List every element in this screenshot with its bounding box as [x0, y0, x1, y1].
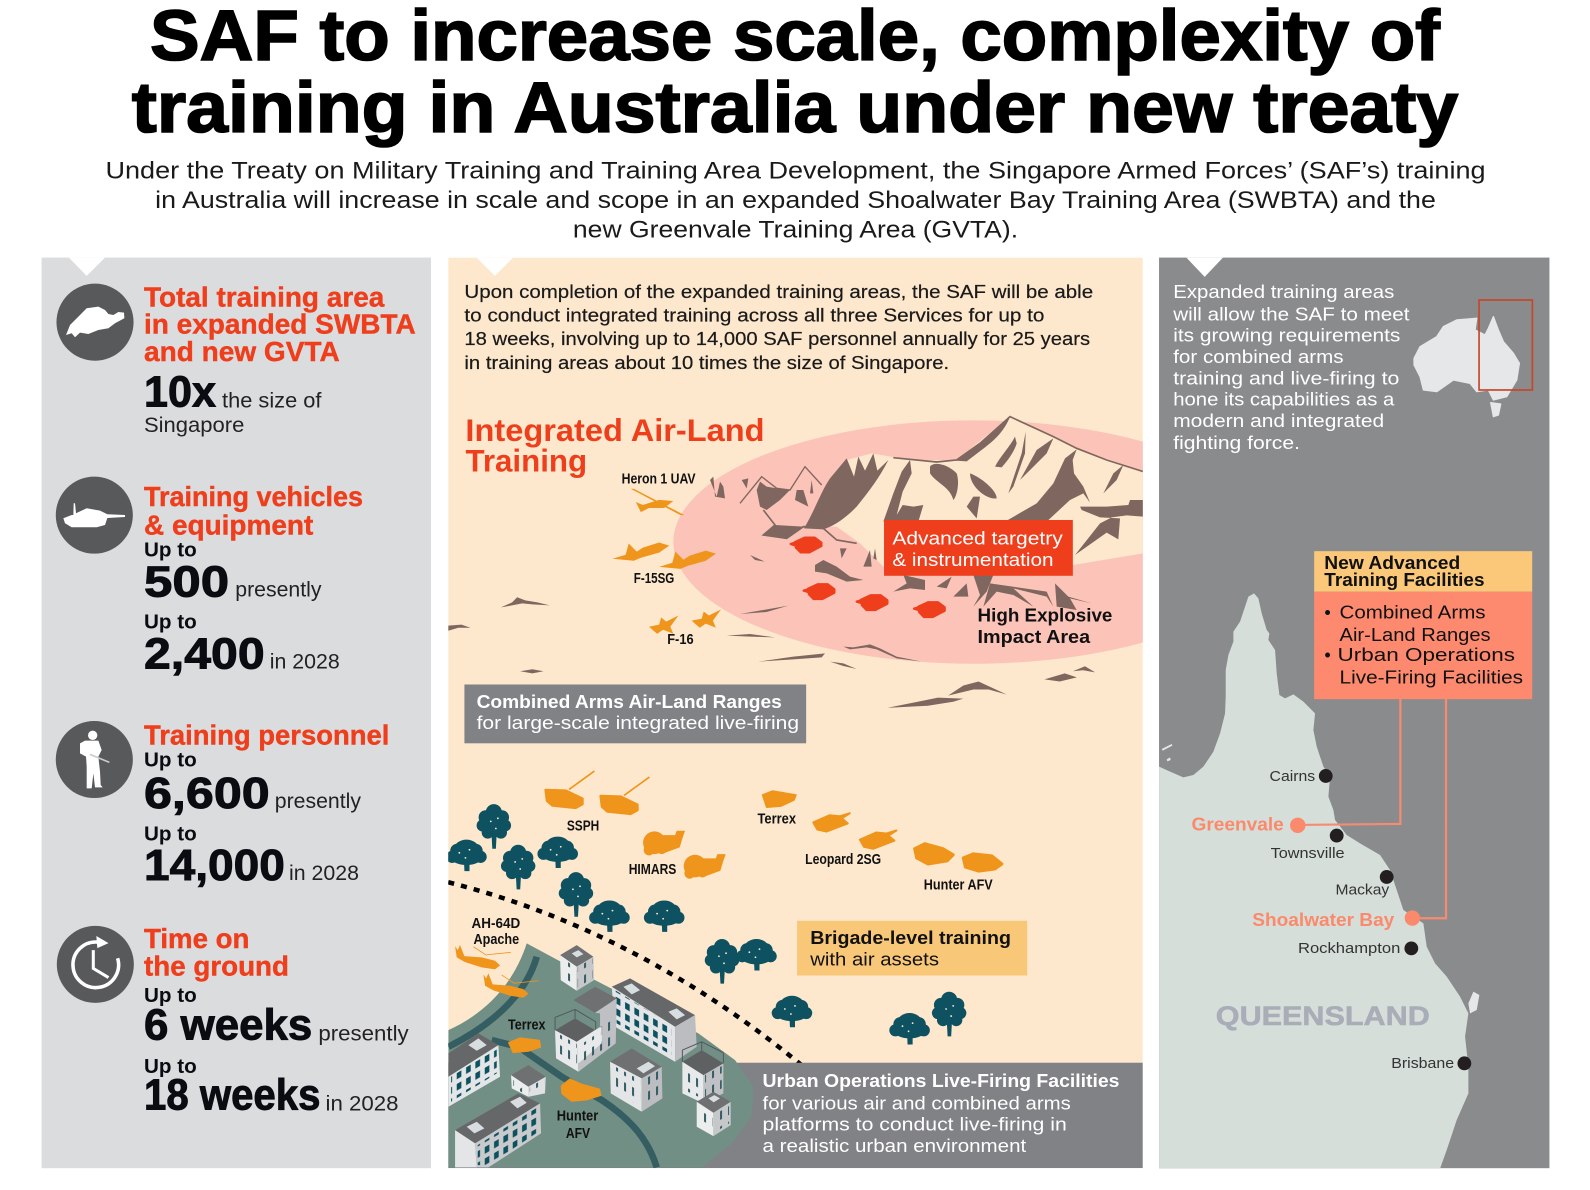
- stat: time on the ground: 18 weeks: [144, 1071, 320, 1119]
- callout: new advanced training facilities: Live-Firing Facilities: [1340, 666, 1523, 687]
- label: HIMARS: HIMARS: [629, 861, 676, 878]
- stat: time on the ground: the ground: [144, 951, 289, 982]
- label: high explosive impact area: High Explosive: [978, 605, 1112, 626]
- icon: tank: [56, 477, 133, 554]
- callout: combined arms ranges: for large-scale integrated live-firing: [477, 712, 799, 733]
- intro text: Under the Treaty on Military Training and Training Area Development, the Singapore Armed Forces’ (SAF’s) training: [105, 157, 1486, 184]
- callout: brigade-level training: Brigade-level training: [810, 927, 1011, 948]
- stat: time on the ground: presently: [318, 1021, 409, 1045]
- panel: integrated air-land training: [448, 258, 1143, 1168]
- map: Queensland: [1159, 593, 1479, 1169]
- state label: QUEENSLAND: [1216, 1001, 1430, 1031]
- trees: [446, 804, 966, 1044]
- stat: total training area: [144, 281, 416, 437]
- callout: brigade-level training: with air assets: [809, 948, 939, 969]
- icon: clock: [57, 926, 134, 1003]
- label: Hunter AFV: Hunter AFV: [924, 876, 993, 893]
- stat: training personnel: Up to: [144, 824, 197, 846]
- paragraph: will allow the SAF to meet: [1172, 303, 1410, 324]
- title: [132, 0, 1459, 148]
- stat: training vehicles and equipment: Up to: [144, 540, 197, 562]
- icon: HIMARS: [643, 831, 726, 879]
- urban terrain and buildings: [448, 943, 753, 1167]
- mountains: [710, 417, 1143, 669]
- heading: integrated air-land training: Integrated Air-Land: [465, 413, 765, 448]
- labels: urban area: Hunter: [557, 1108, 598, 1125]
- callout: new advanced training facilities: [1314, 551, 1532, 699]
- stat: training vehicles and equipment: Training vehicles: [144, 481, 363, 512]
- location: Mackay: [1335, 870, 1394, 898]
- callout: new advanced training facilities: Training Facilities: [1324, 569, 1485, 590]
- callout: advanced targetry: & instrumentation: [892, 549, 1054, 570]
- stat: training personnel: [144, 719, 389, 890]
- paragraph: training and live-firing to: [1173, 367, 1399, 388]
- label: high explosive impact area: Impact Area: [978, 626, 1091, 647]
- stat: time on the ground: [144, 923, 409, 1119]
- title: training in Australia under new treaty: [132, 69, 1459, 148]
- paragraph: fighting force.: [1173, 432, 1300, 453]
- stat: training personnel: 14,000: [144, 842, 285, 890]
- stat: time on the ground: 6 weeks: [144, 1001, 312, 1049]
- scattered rocks: [448, 597, 1095, 708]
- location: Shoalwater Bay: Shoalwater Bay: [1252, 909, 1395, 930]
- callout: new advanced training facilities: •: [1324, 644, 1331, 665]
- icon: Singapore map: [56, 284, 134, 361]
- icon: SSPH: [546, 771, 649, 814]
- callout: new advanced training facilities: Urban Operations: [1338, 644, 1515, 665]
- stat: total training area: 10x: [144, 369, 216, 417]
- stat: total training area: and new GVTA: [144, 336, 340, 367]
- location: Townsville: [1271, 829, 1345, 862]
- callout: advanced targetry: Advanced targetry: [892, 528, 1064, 549]
- urban operations text: platforms to conduct live-firing in: [763, 1114, 1067, 1135]
- location: Brisbane: Brisbane: [1391, 1055, 1454, 1072]
- label: Terrex: Terrex: [757, 810, 796, 827]
- label: SSPH: SSPH: [567, 818, 599, 835]
- labels: urban area: AH-64D: [472, 915, 520, 932]
- paragraph: Expanded training areas: [1173, 281, 1394, 302]
- paragraph: hone its capabilities as a: [1173, 389, 1395, 410]
- stat: training personnel: 6,600: [144, 770, 270, 818]
- target tanks: [791, 538, 945, 617]
- stat: training vehicles and equipment: 2,400: [144, 630, 265, 678]
- stat: time on the ground: Up to: [144, 1056, 197, 1078]
- callout: brigade-level training: [797, 921, 1027, 976]
- callout: new advanced training facilities: Air-Land Ranges: [1340, 624, 1491, 645]
- location: Cairns: Cairns: [1270, 768, 1316, 785]
- stat: total training area: the size of: [222, 389, 322, 413]
- icon: Terrex: [763, 791, 796, 807]
- labels: urban area: Apache: [474, 931, 519, 948]
- intro text: [105, 157, 1486, 243]
- location: Cairns: [1270, 768, 1333, 785]
- paragraph: [1172, 281, 1410, 453]
- stat: training vehicles and equipment: [144, 481, 363, 678]
- stat: time on the ground: Up to: [144, 985, 197, 1007]
- icon: Hunter AFV: [915, 844, 1002, 871]
- callout: new advanced training facilities: •: [1324, 602, 1331, 623]
- icon: Apache helicopters: [455, 945, 539, 998]
- ground vehicles: [546, 771, 1002, 893]
- icon: Hunter AFV in town: [562, 1079, 600, 1101]
- callout: combined arms ranges: Combined Arms Air-Land Ranges: [477, 691, 782, 712]
- aircraft group: [612, 471, 721, 648]
- stat: total training area: Singapore: [144, 413, 244, 437]
- stat: total training area: in expanded SWBTA: [144, 309, 416, 340]
- urban operations text: [763, 1070, 1119, 1156]
- paragraph: modern and integrated: [1173, 410, 1384, 431]
- labels: urban area: Terrex: [508, 1016, 546, 1033]
- intro paragraph: 18 weeks, involving up to 14,000 SAF personnel annually for 25 years: [464, 328, 1090, 349]
- intro text: in Australia will increase in scale and scope in an expanded Shoalwater Bay Training Area (SWBTA) and the: [155, 187, 1436, 214]
- connector lines: [1298, 699, 1446, 918]
- stat: training vehicles and equipment: & equipment: [144, 509, 313, 540]
- stat: training vehicles and equipment: Up to: [144, 612, 197, 634]
- intro paragraph: to conduct integrated training across all three Services for up to: [464, 304, 1044, 325]
- location: Greenvale: Greenvale: [1191, 814, 1284, 835]
- urban vehicles and aircraft: [455, 945, 600, 1101]
- paragraph: for combined arms: [1173, 346, 1344, 367]
- location: Rockhampton: Rockhampton: [1298, 940, 1400, 957]
- panel: Queensland map: [1159, 258, 1549, 1169]
- callout: new advanced training facilities: Combined Arms: [1340, 602, 1486, 623]
- icon: Terrex in town: [509, 1038, 540, 1052]
- stat: time on the ground: Time on: [144, 923, 249, 954]
- stat: training personnel: Up to: [144, 750, 197, 772]
- icon: Leopard 2SG: [813, 813, 896, 849]
- stat: training personnel: Training personnel: [144, 719, 389, 750]
- icon: F-16 jets: [649, 609, 721, 634]
- label: F-16: F-16: [667, 631, 694, 648]
- stat: time on the ground: in 2028: [326, 1091, 399, 1115]
- urban operations text: Urban Operations Live-Firing Facilities: [763, 1070, 1119, 1091]
- label: Leopard 2SG: Leopard 2SG: [805, 851, 881, 868]
- urban operations text: for various air and combined arms: [763, 1092, 1071, 1113]
- panel: key figures: [42, 258, 431, 1168]
- stat: training vehicles and equipment: 500: [144, 558, 229, 606]
- labels: urban area: [472, 915, 598, 1142]
- label: Heron 1 UAV: Heron 1 UAV: [622, 471, 696, 488]
- icon: Heron UAV: [631, 489, 684, 515]
- impact area ellipse: [673, 420, 1143, 664]
- labels: urban area: AFV: [566, 1125, 591, 1142]
- urban operations box: [448, 1063, 1143, 1168]
- stat: total training area: Total training area: [144, 281, 385, 312]
- intro paragraph: Upon completion of the expanded training areas, the SAF will be able: [464, 281, 1093, 302]
- icon: soldier: [56, 721, 133, 798]
- location: Mackay: Mackay: [1335, 881, 1390, 898]
- intro text: new Greenvale Training Area (GVTA).: [573, 216, 1018, 243]
- stat: training personnel: presently: [275, 789, 361, 813]
- stat: training personnel: in 2028: [289, 861, 359, 885]
- heading: integrated air-land training: [465, 413, 765, 479]
- intro paragraph: in training areas about 10 times the size of Singapore.: [464, 352, 949, 373]
- callout: combined arms ranges: [464, 684, 806, 743]
- stat: training vehicles and equipment: presently: [235, 577, 322, 601]
- map: Australia locator: [1414, 300, 1532, 417]
- dotted boundary line: [448, 882, 801, 1065]
- icon: F-15SG jets: [612, 543, 716, 569]
- heading: integrated air-land training: Training: [465, 444, 587, 479]
- paragraph: its growing requirements: [1173, 325, 1400, 346]
- callout: new advanced training facilities: New Advanced: [1324, 552, 1460, 573]
- intro paragraph: [464, 281, 1093, 373]
- label: F-15SG: F-15SG: [634, 570, 674, 587]
- urban operations text: a realistic urban environment: [763, 1135, 1026, 1156]
- callout: advanced targetry: [884, 520, 1073, 576]
- stat: training vehicles and equipment: in 2028: [270, 649, 340, 673]
- location: Townsville: Townsville: [1271, 845, 1345, 862]
- label: high explosive impact area: [978, 605, 1112, 647]
